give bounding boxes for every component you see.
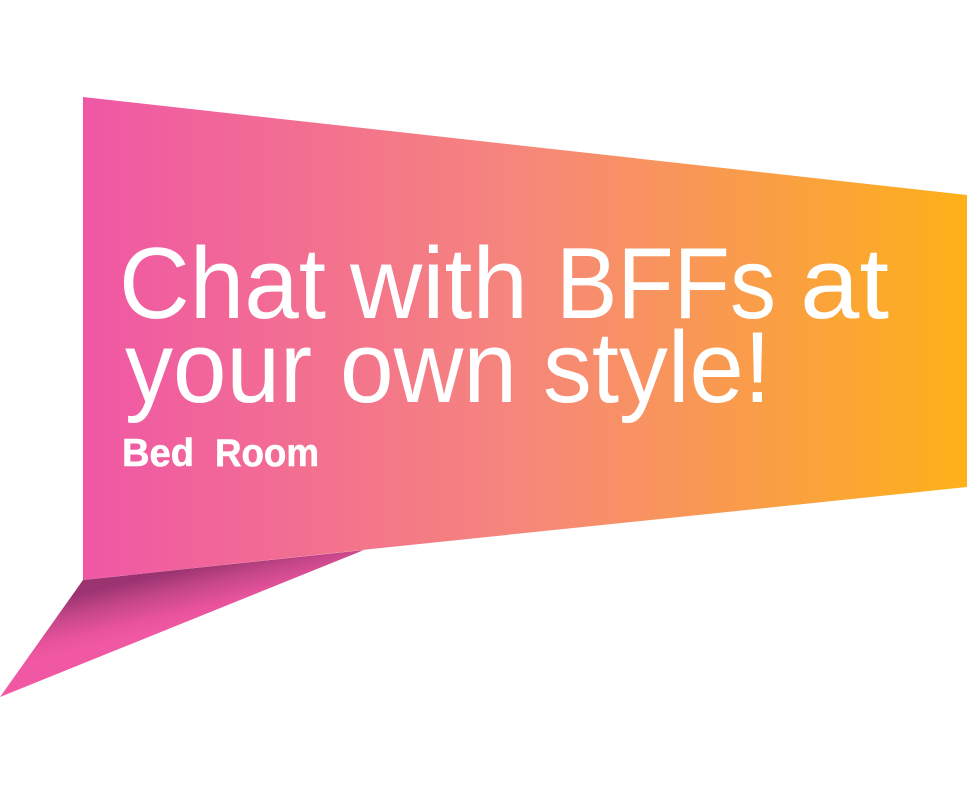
subheading xyxy=(122,432,319,475)
folded ribbon tail xyxy=(0,550,364,697)
headline: style! xyxy=(543,312,771,424)
subheading: Bed xyxy=(122,432,194,475)
main banner panel xyxy=(83,97,967,580)
headline: at xyxy=(800,228,889,340)
headline: Chat xyxy=(119,228,326,340)
headline: with xyxy=(349,228,528,340)
headline: own xyxy=(340,312,517,424)
subheading: Room xyxy=(215,432,319,475)
headline: your xyxy=(125,312,312,424)
headline: BFFs xyxy=(556,228,776,340)
headline xyxy=(119,228,889,424)
